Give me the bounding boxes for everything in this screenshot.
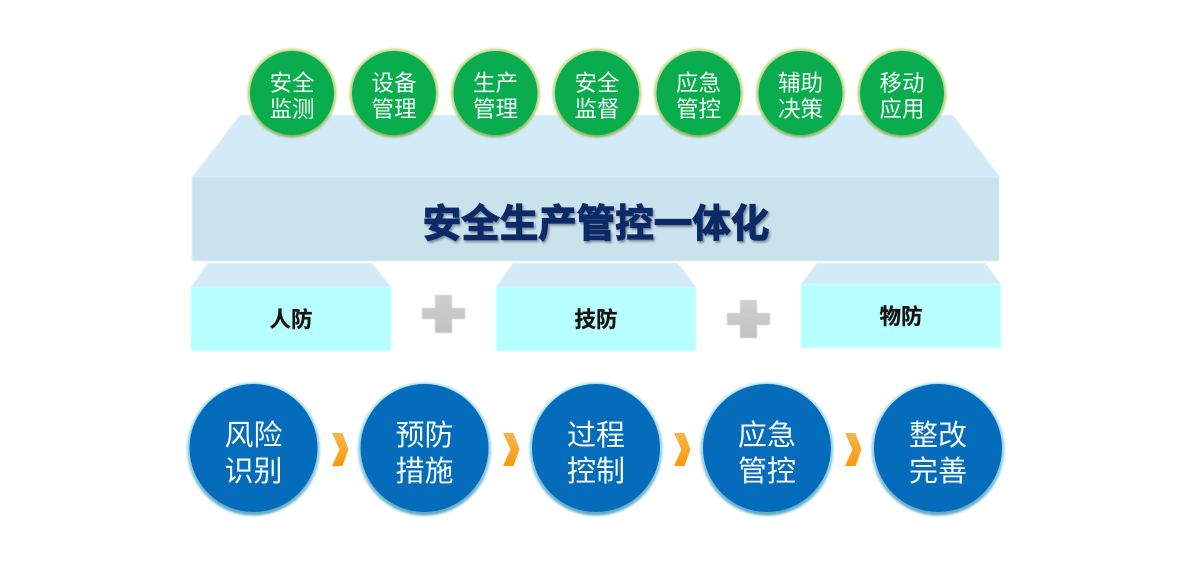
circle: 生产管理 (451, 48, 540, 138)
panel: 人防 (191, 263, 391, 351)
circle: 设备管理 (350, 48, 438, 138)
panel: 技防 (496, 263, 696, 351)
circle: 整改完善: 完善 (909, 455, 967, 488)
icon: plus 1 (422, 295, 465, 333)
panel: 技防: 技防 (574, 308, 618, 332)
platform: front band with title (192, 177, 999, 261)
arrow 1 (332, 433, 348, 466)
circle: 应急管控 (700, 382, 834, 516)
circle: 过程控制: 控制 (567, 455, 625, 488)
platform: front band with title: 安全生产管控一体化 (424, 205, 771, 248)
circle: 整改完善 (872, 382, 1004, 516)
panel: 物防: 物防 (879, 305, 923, 329)
circle: 风险识别: 风险 (224, 419, 283, 452)
circle: 生产管理: 管理 (473, 97, 518, 122)
circle: 应急管控 (654, 48, 743, 138)
circle: 辅助决策: 辅助 (778, 71, 823, 96)
circle: 移动应用: 应用 (879, 97, 925, 122)
circle: 辅助决策 (756, 48, 845, 138)
circle: 过程控制: 过程 (567, 419, 625, 452)
blue process row (187, 382, 1004, 516)
icon: plus 2 (727, 300, 770, 338)
circle: 移动应用 (858, 48, 946, 138)
circle: 安全监督: 监督 (574, 97, 620, 122)
circle: 预防措施: 措施 (395, 455, 454, 488)
circle: 移动应用: 移动 (879, 71, 925, 96)
circle: 应急管控: 管控 (676, 97, 721, 122)
circle: 预防措施 (358, 382, 491, 516)
arrow 4 (845, 433, 862, 466)
circle: 过程控制 (530, 382, 662, 516)
title: 安全生产管控一体化 (423, 203, 769, 246)
circle: 预防措施: 预防 (395, 419, 454, 452)
circle: 安全监测: 监测 (269, 97, 315, 122)
circle: 设备管理: 管理 (371, 97, 417, 122)
green circles row (248, 48, 946, 138)
circle: 应急管控: 应急 (738, 419, 796, 452)
arrow 2 (503, 433, 520, 466)
circle: 安全监测 (248, 48, 336, 138)
circle: 应急管控: 应急 (676, 71, 721, 96)
circle: 安全监测: 安全 (269, 71, 315, 96)
arrow 3 (674, 433, 690, 466)
circle: 整改完善: 整改 (909, 419, 967, 452)
circle: 安全监督 (552, 48, 642, 138)
circle: 设备管理: 设备 (371, 71, 417, 96)
platform: top surface (192, 115, 1000, 177)
circle: 应急管控: 管控 (738, 455, 796, 488)
panel: 物防 (801, 263, 1001, 348)
circle: 风险识别 (187, 382, 320, 516)
circle: 生产管理: 生产 (473, 71, 518, 96)
circle: 安全监督: 安全 (574, 71, 620, 96)
panel: 人防: 人防 (269, 308, 313, 332)
circle: 风险识别: 识别 (224, 456, 283, 488)
circle: 辅助决策: 决策 (778, 97, 823, 122)
